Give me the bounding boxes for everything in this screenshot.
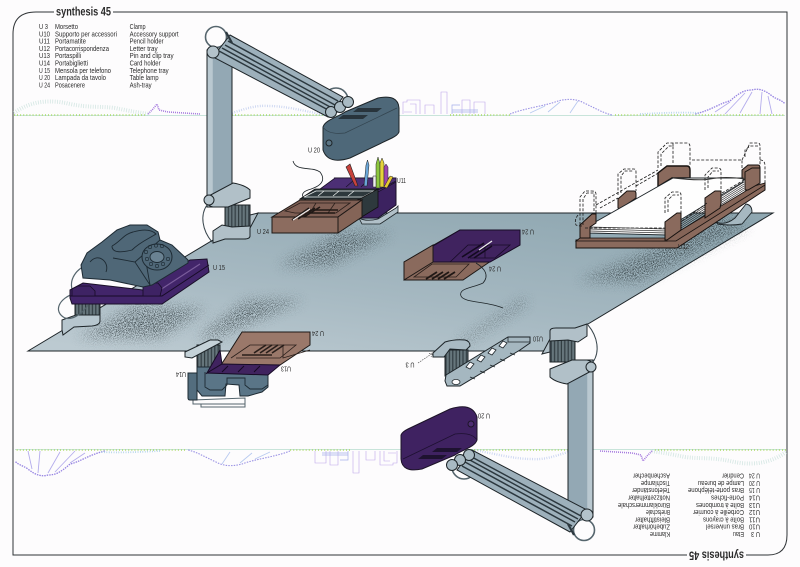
card holder U14 bbox=[188, 367, 268, 407]
legend top: Supporto per accessori bbox=[55, 29, 117, 38]
legend top: U11 bbox=[39, 37, 50, 46]
legend top: Table lamp bbox=[130, 73, 159, 82]
metal insert bbox=[300, 189, 378, 199]
legend top: Portamatite bbox=[55, 37, 86, 46]
lamp head bottom bbox=[401, 407, 477, 470]
legend top: Mensola per telefono bbox=[55, 66, 111, 75]
base bbox=[576, 183, 765, 248]
legend top: Card holder bbox=[130, 58, 161, 68]
legend bottom rotated: Zubehörhalter bbox=[633, 523, 670, 532]
clamp plate top lamp bbox=[213, 213, 258, 243]
dashed ghost extension bbox=[575, 143, 765, 228]
legend bottom rotated: U 15 bbox=[749, 486, 760, 495]
title top: synthesis 45 bbox=[56, 6, 111, 18]
lamp bottom U20 bbox=[401, 324, 597, 540]
telephone clamp bbox=[62, 303, 100, 335]
legend top bbox=[39, 22, 179, 89]
legend top: U 3 bbox=[39, 22, 48, 31]
clamp plate bottom lamp bbox=[542, 324, 587, 354]
component labels: U14 bbox=[176, 370, 186, 377]
legend bottom rotated: Bras porte-téléphone bbox=[688, 486, 744, 495]
legend bottom rotated: Telefonständer bbox=[632, 486, 670, 495]
component labels: U 3 bbox=[405, 360, 414, 368]
title bottom rotated: synthesis 45 bbox=[689, 548, 744, 560]
legend top: U 15 bbox=[39, 66, 50, 75]
legend bottom rotated: U10 bbox=[749, 523, 760, 532]
legend bottom rotated: Lampe de bureau bbox=[698, 479, 744, 488]
legend top: Portabiglietti bbox=[55, 58, 88, 68]
component labels: U 24 bbox=[312, 329, 324, 336]
component labels: U 20 bbox=[478, 412, 490, 418]
legend top: U10 bbox=[39, 29, 50, 38]
component labels bbox=[176, 148, 689, 418]
table shadows bbox=[78, 216, 748, 345]
legend bottom rotated: U 20 bbox=[749, 479, 760, 488]
legend top: Accessory support bbox=[130, 29, 179, 38]
legend bottom rotated: Tischlampe bbox=[641, 479, 670, 488]
table top bbox=[28, 213, 773, 351]
legend bottom rotated: Aschenbecher bbox=[633, 472, 670, 481]
pin and clip tray U13 with U24 under bbox=[207, 332, 310, 375]
legend bottom rotated: Bras universel bbox=[706, 523, 744, 532]
landscape horizon top bbox=[14, 89, 785, 116]
legend top: Ash-tray bbox=[130, 80, 152, 89]
U3 arrow bbox=[418, 353, 433, 363]
letter tray U12 bbox=[575, 143, 765, 248]
back posts bbox=[658, 166, 690, 186]
component labels: U10 bbox=[533, 334, 543, 342]
pens bbox=[346, 157, 393, 188]
component labels: U13 bbox=[281, 364, 291, 372]
legend top: U12 bbox=[39, 44, 50, 53]
wire from pencil holder bbox=[293, 161, 323, 200]
legend bottom rotated: Etau bbox=[733, 530, 744, 539]
legend top: Letter tray bbox=[130, 44, 158, 53]
ash-tray centre U24 bbox=[404, 230, 520, 280]
legend bottom rotated bbox=[618, 472, 760, 539]
legend top: U 20 bbox=[39, 73, 50, 82]
component labels: U 24 bbox=[257, 229, 269, 236]
legend bottom rotated: U 24 bbox=[749, 472, 760, 481]
legend bottom rotated: Klamme bbox=[650, 530, 670, 539]
legend bottom rotated: U14 bbox=[749, 494, 760, 502]
component labels: U 24 bbox=[522, 228, 534, 234]
legend top: Lampada da tavolo bbox=[55, 73, 106, 82]
underside clamp U14 bbox=[185, 340, 222, 372]
legend bottom rotated: Boîte à trombones bbox=[696, 501, 744, 510]
letter tray clamp bbox=[716, 204, 752, 225]
front posts bbox=[580, 214, 596, 238]
component labels: U 24 bbox=[489, 264, 501, 272]
legend top: Portacorrispondenza bbox=[55, 44, 110, 53]
legend top: Clamp bbox=[130, 22, 146, 31]
legend bottom rotated: Büroklammerschale bbox=[618, 501, 670, 510]
legend bottom rotated: Notizzettelhalter bbox=[628, 494, 670, 502]
pencil holder U11 bbox=[300, 157, 398, 224]
legend top: Morsetto bbox=[55, 22, 78, 31]
legend bottom rotated: Bleistifthalter bbox=[635, 515, 670, 524]
component labels: U12 bbox=[678, 244, 689, 251]
component labels: U 15 bbox=[213, 265, 225, 272]
legend top: Pencil holder bbox=[130, 37, 164, 46]
legend bottom rotated: U 3 bbox=[751, 530, 760, 539]
legend top: Portaspilli bbox=[55, 51, 81, 60]
landscape horizon bottom bbox=[15, 449, 786, 476]
legend top: Posacenere bbox=[55, 80, 85, 89]
paper stack bbox=[590, 178, 743, 235]
telephone tray U15 bbox=[70, 259, 209, 304]
ash-tray U24 top bbox=[272, 200, 362, 233]
legend bottom rotated: Corbeille à courrier bbox=[693, 508, 744, 517]
base bbox=[359, 206, 398, 224]
legend bottom rotated: Boîte à crayons bbox=[703, 515, 744, 524]
lamp top U20 bbox=[203, 26, 399, 243]
legend bottom rotated: U12 bbox=[749, 508, 760, 517]
wire centre bbox=[461, 263, 503, 308]
legend top: U 24 bbox=[39, 80, 50, 89]
legend top: Telephone tray bbox=[130, 66, 169, 75]
legend bottom rotated: Cendrier bbox=[722, 472, 744, 481]
legend top: Pin and clip tray bbox=[130, 51, 174, 60]
legend bottom rotated: Briefschale bbox=[646, 508, 670, 517]
component labels: U 20 bbox=[308, 148, 320, 154]
component labels: U11 bbox=[397, 178, 406, 185]
legend top: U13 bbox=[39, 51, 50, 60]
telephone bbox=[81, 225, 188, 287]
accessory support U10 with clamp bbox=[433, 337, 530, 386]
legend bottom rotated: Porte-fiches bbox=[711, 494, 744, 502]
telephone cords bbox=[58, 264, 93, 318]
legend bottom rotated: U11 bbox=[749, 515, 760, 524]
legend bottom rotated: U13 bbox=[749, 501, 760, 510]
legend top: U14 bbox=[39, 58, 50, 68]
lamp head top bbox=[323, 97, 399, 160]
